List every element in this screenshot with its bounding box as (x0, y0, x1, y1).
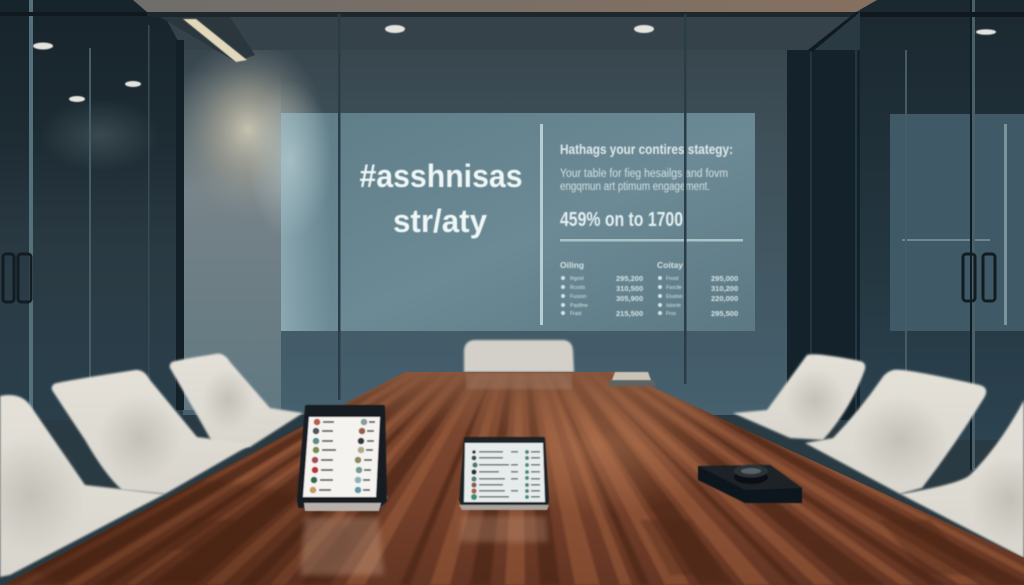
panel vertical divider (540, 124, 543, 325)
panel heading: Hathags your contires stategy: (560, 142, 733, 157)
strip light housing (160, 17, 255, 62)
panel table right: Coitay (657, 260, 683, 270)
panel table left: Fusson (570, 294, 587, 300)
panel description: engqmun art ptimum engagement. (560, 181, 710, 193)
right chair middle (805, 370, 986, 494)
left glass reflection glow (40, 99, 160, 171)
panel table left: 310,500 (616, 284, 643, 293)
door handle left (3, 254, 31, 302)
wall light glow (170, 38, 326, 222)
tablet left (299, 407, 388, 511)
right chair far (733, 354, 865, 440)
strip light (183, 19, 247, 62)
conference table (3, 372, 1024, 585)
ghost reflected panel (890, 114, 1024, 331)
right glass partition (860, 0, 1024, 440)
panel table left: Ihgost (570, 276, 584, 282)
panel horizontal rule (560, 239, 743, 242)
panel table left: Oiling (560, 260, 584, 270)
panel table left (560, 260, 643, 318)
panel table right: Fros (666, 311, 676, 317)
panel description: Your table for fieg hesailgs and fovm (560, 168, 728, 180)
right dark column (787, 50, 862, 420)
panel table right: Fnost (666, 276, 679, 282)
ceiling edge band (147, 12, 856, 17)
left glass partition (0, 0, 183, 420)
tablet right list (471, 450, 540, 500)
panel title: str/aty (393, 203, 487, 239)
ceiling soffit (165, 17, 850, 50)
right chair near (900, 400, 1024, 558)
panel table right: 220,000 (711, 294, 738, 303)
panel table left: Pastfew (570, 303, 588, 309)
panel title: #asshnisas (360, 158, 522, 194)
panel table right: Istonte (666, 303, 681, 309)
panel table right: Eluston (666, 294, 683, 300)
panel table left: 305,900 (616, 294, 643, 303)
table reflection tablet left (300, 517, 384, 575)
panel statistic: 459% on to 1700 (560, 209, 683, 231)
panel table right: 310,200 (711, 284, 738, 293)
left chair middle (52, 370, 252, 494)
panel table left: 215,500 (616, 309, 643, 318)
back wall (183, 15, 788, 415)
panel table right: 295,500 (711, 309, 738, 318)
tablet right (459, 439, 549, 510)
panel table right: Fsocile (666, 285, 682, 291)
panel table right (657, 260, 738, 318)
left chair near (0, 395, 165, 577)
panel table left: Frast (570, 311, 582, 317)
panel description (560, 168, 728, 193)
projected panel (248, 80, 755, 331)
ceiling (133, 0, 877, 12)
downlights (33, 25, 996, 102)
table reflection tablet right (460, 516, 548, 542)
door handle right (963, 254, 995, 301)
left wall wash (183, 70, 281, 410)
panel table left: Rcosts (570, 285, 586, 291)
panel table left: 295,200 (616, 274, 643, 283)
panel title (360, 158, 522, 239)
stacked items on table (609, 372, 656, 386)
far chair (464, 340, 574, 372)
black box device (698, 464, 802, 503)
left chair far (170, 354, 303, 450)
tablet left app list (310, 419, 375, 493)
panel table right: 295,000 (711, 274, 738, 283)
